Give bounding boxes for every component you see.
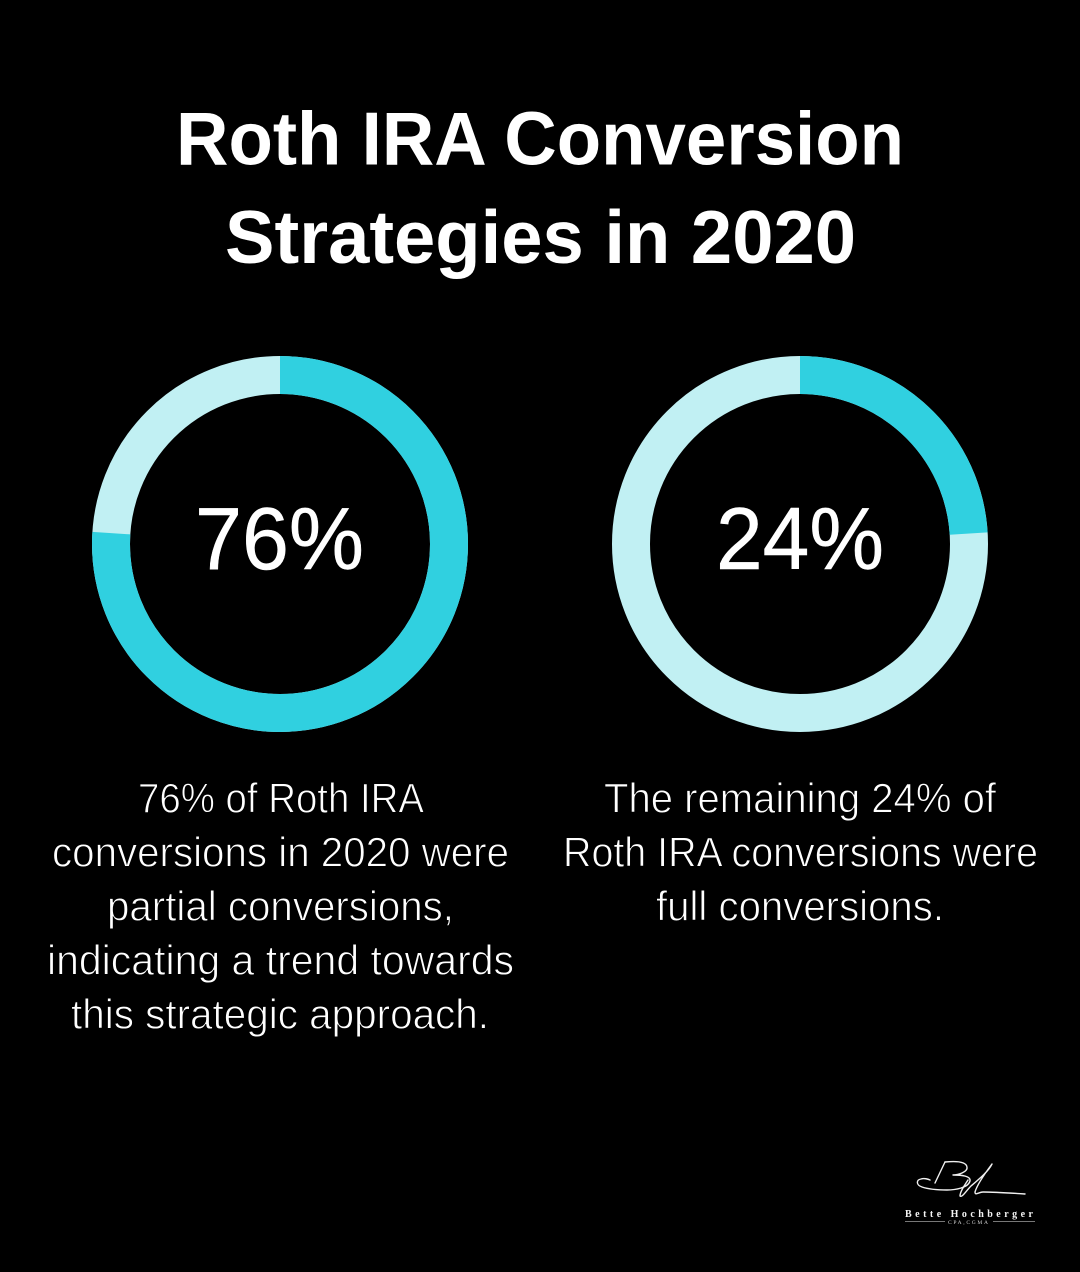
- donut chart: 24%: [631, 375, 969, 713]
- text block: partial conversions: partial conversions,: [107, 882, 454, 930]
- title: [176, 96, 904, 279]
- icon: BH signature: [917, 1162, 1025, 1196]
- text block: full conversions: [563, 774, 1038, 930]
- text block: full conversions: The remaining 24% of: [604, 774, 996, 822]
- panel: 76% partial conversions: [47, 375, 514, 1038]
- text block: full conversions: full conversions.: [656, 882, 944, 930]
- donut chart: 76%: [111, 375, 449, 713]
- panel: 24% full conversions: [563, 375, 1038, 930]
- text block: partial conversions: this strategic approach.: [71, 990, 489, 1038]
- text block: partial conversions: 76% of Roth IRA: [138, 774, 424, 822]
- text: name: Bette Hochberger: [905, 1209, 1034, 1220]
- title: Roth IRA Conversion: [176, 96, 904, 180]
- text block: partial conversions: [47, 774, 514, 1038]
- logo: Bette Hochberger signature: [905, 1162, 1035, 1226]
- donut chart: 24%: 24%: [716, 489, 884, 588]
- text: credentials: CPA,CGMA: [948, 1220, 988, 1226]
- text block: partial conversions: indicating a trend towards: [47, 936, 514, 984]
- title: Strategies in 2020: [225, 195, 856, 279]
- text block: partial conversions: conversions in 2020 were: [52, 828, 509, 876]
- text block: full conversions: Roth IRA conversions were: [563, 828, 1038, 876]
- donut chart: 76%: 76%: [195, 489, 364, 588]
